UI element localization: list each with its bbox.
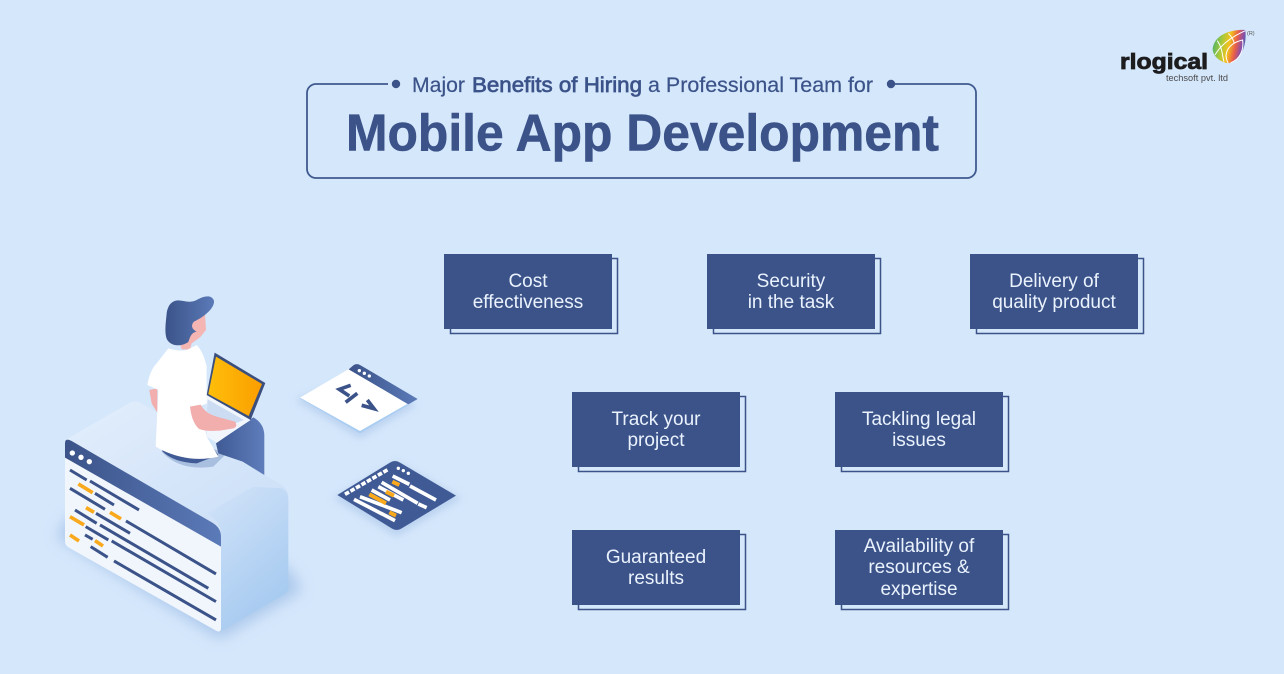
subtitle: Benefits of Hiring bbox=[472, 73, 642, 97]
card: Availability of resources and expertise: resources & bbox=[868, 557, 970, 578]
logo registered mark: (R) bbox=[1247, 31, 1255, 37]
hair bbox=[165, 296, 214, 345]
title: Mobile App Development bbox=[346, 104, 939, 162]
block right face bbox=[207, 487, 288, 632]
card: Delivery of quality product: Delivery of bbox=[1009, 271, 1100, 292]
logo leaf icon bbox=[1213, 30, 1246, 63]
title frame bbox=[307, 80, 976, 178]
card: Tackling legal issues bbox=[835, 392, 1008, 472]
block shadow bbox=[57, 513, 302, 638]
code lines bbox=[70, 470, 216, 620]
person bbox=[147, 296, 265, 475]
card: Cost effectiveness: Cost bbox=[508, 271, 548, 292]
card: Security in the task: Security bbox=[757, 271, 826, 292]
card: Delivery of quality product: quality product bbox=[992, 292, 1117, 313]
logo tagline: techsoft pvt. ltd bbox=[1166, 73, 1228, 84]
laptop screen bbox=[207, 353, 265, 420]
window header bbox=[65, 440, 221, 547]
neck and head bbox=[180, 313, 206, 349]
card: Guaranteed results: Guaranteed bbox=[606, 547, 706, 568]
logo: rlogical bbox=[1120, 30, 1255, 84]
logo wordmark: rlogical bbox=[1120, 49, 1208, 74]
card: Cost effectiveness bbox=[444, 254, 618, 334]
card: Availability of resources and expertise bbox=[835, 530, 1008, 610]
card: Delivery of quality product bbox=[970, 254, 1144, 334]
far arm bbox=[149, 388, 157, 413]
card: Track your project: Track your bbox=[611, 409, 701, 430]
keyboard bbox=[207, 399, 244, 427]
forearm bbox=[190, 405, 236, 431]
subtitle: Major bbox=[412, 73, 465, 97]
seat shadow bbox=[162, 447, 227, 468]
card: Track your project: project bbox=[627, 430, 685, 451]
card: Tackling legal issues: Tackling legal bbox=[862, 409, 976, 430]
card: Availability of resources and expertise: Availability of bbox=[864, 536, 975, 557]
trousers bbox=[162, 440, 218, 463]
card: Cost effectiveness: effectiveness bbox=[473, 292, 583, 313]
subtitle: a Professional Team for bbox=[648, 73, 873, 97]
card: Tackling legal issues: issues bbox=[892, 430, 946, 451]
card: Security in the task bbox=[707, 254, 880, 334]
block top face bbox=[65, 401, 288, 543]
laptop base bbox=[207, 395, 251, 443]
shirt bbox=[147, 345, 218, 459]
window on block bbox=[65, 440, 221, 632]
icon: code editor window bbox=[333, 461, 462, 537]
card: Track your project bbox=[572, 392, 746, 472]
illustration: developer on code block bbox=[57, 296, 302, 638]
card: Guaranteed results bbox=[572, 530, 746, 610]
window dots bbox=[70, 450, 92, 464]
card: Guaranteed results: results bbox=[628, 568, 684, 589]
window body bbox=[65, 457, 221, 632]
leg bbox=[216, 417, 264, 475]
subtitle bbox=[412, 73, 873, 97]
card: Availability of resources and expertise: expertise bbox=[880, 579, 958, 600]
icon: code window bbox=[295, 364, 418, 438]
highlighted code bbox=[70, 484, 121, 546]
card: Security in the task: in the task bbox=[748, 292, 835, 313]
